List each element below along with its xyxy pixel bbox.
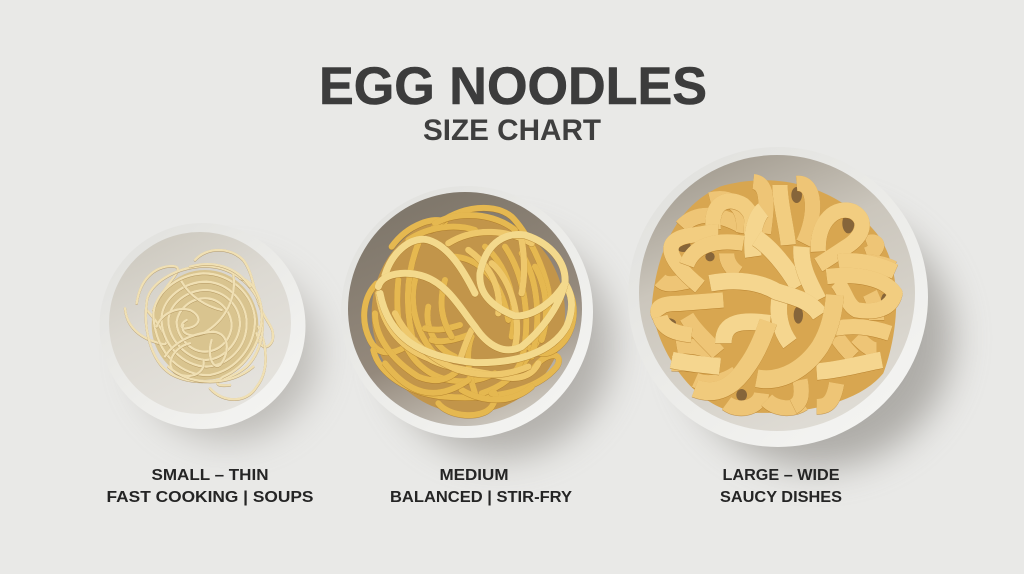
panel: medium bowl xyxy=(341,186,612,457)
caption: small: FAST COOKING | SOUPS xyxy=(106,489,314,506)
back ribbons xyxy=(660,182,893,408)
noodles: medium xyxy=(364,208,574,415)
bowl: large xyxy=(628,147,928,447)
noodle base xyxy=(152,270,258,380)
title block xyxy=(319,57,707,147)
top ribbons xyxy=(695,295,835,391)
caption: medium xyxy=(390,467,572,506)
noodle base xyxy=(372,213,565,413)
caption: medium: BALANCED | STIR-FRY xyxy=(390,489,572,506)
plate: small xyxy=(100,223,306,429)
mid ribbons xyxy=(658,185,895,335)
noodles: small thin xyxy=(125,250,273,399)
shadow: large bowl xyxy=(683,208,953,468)
caption: large xyxy=(720,467,842,506)
front ribbons xyxy=(672,210,882,372)
subtitle: SIZE CHART xyxy=(423,114,601,147)
gaps between ribbons xyxy=(657,187,889,401)
shadow: medium bowl xyxy=(388,233,612,457)
panel: large bowl xyxy=(628,147,953,468)
caption: large: SAUCY DISHES xyxy=(720,489,842,506)
noodles: large xyxy=(652,180,896,413)
mid noodle layer xyxy=(378,232,538,378)
caption: small xyxy=(106,467,314,506)
panel: small bowl xyxy=(100,223,318,440)
title: EGG NOODLES xyxy=(319,57,707,116)
bowl: medium xyxy=(341,186,593,438)
front noodle layer xyxy=(378,235,572,363)
shadow: small bowl xyxy=(138,264,318,440)
noodle mass xyxy=(652,180,896,413)
caption: small: SMALL – THIN xyxy=(152,467,268,484)
noodle strands xyxy=(125,250,273,399)
caption: medium: MEDIUM xyxy=(440,467,508,484)
back noodle layer xyxy=(364,208,574,415)
caption: large: LARGE – WIDE xyxy=(722,467,840,484)
